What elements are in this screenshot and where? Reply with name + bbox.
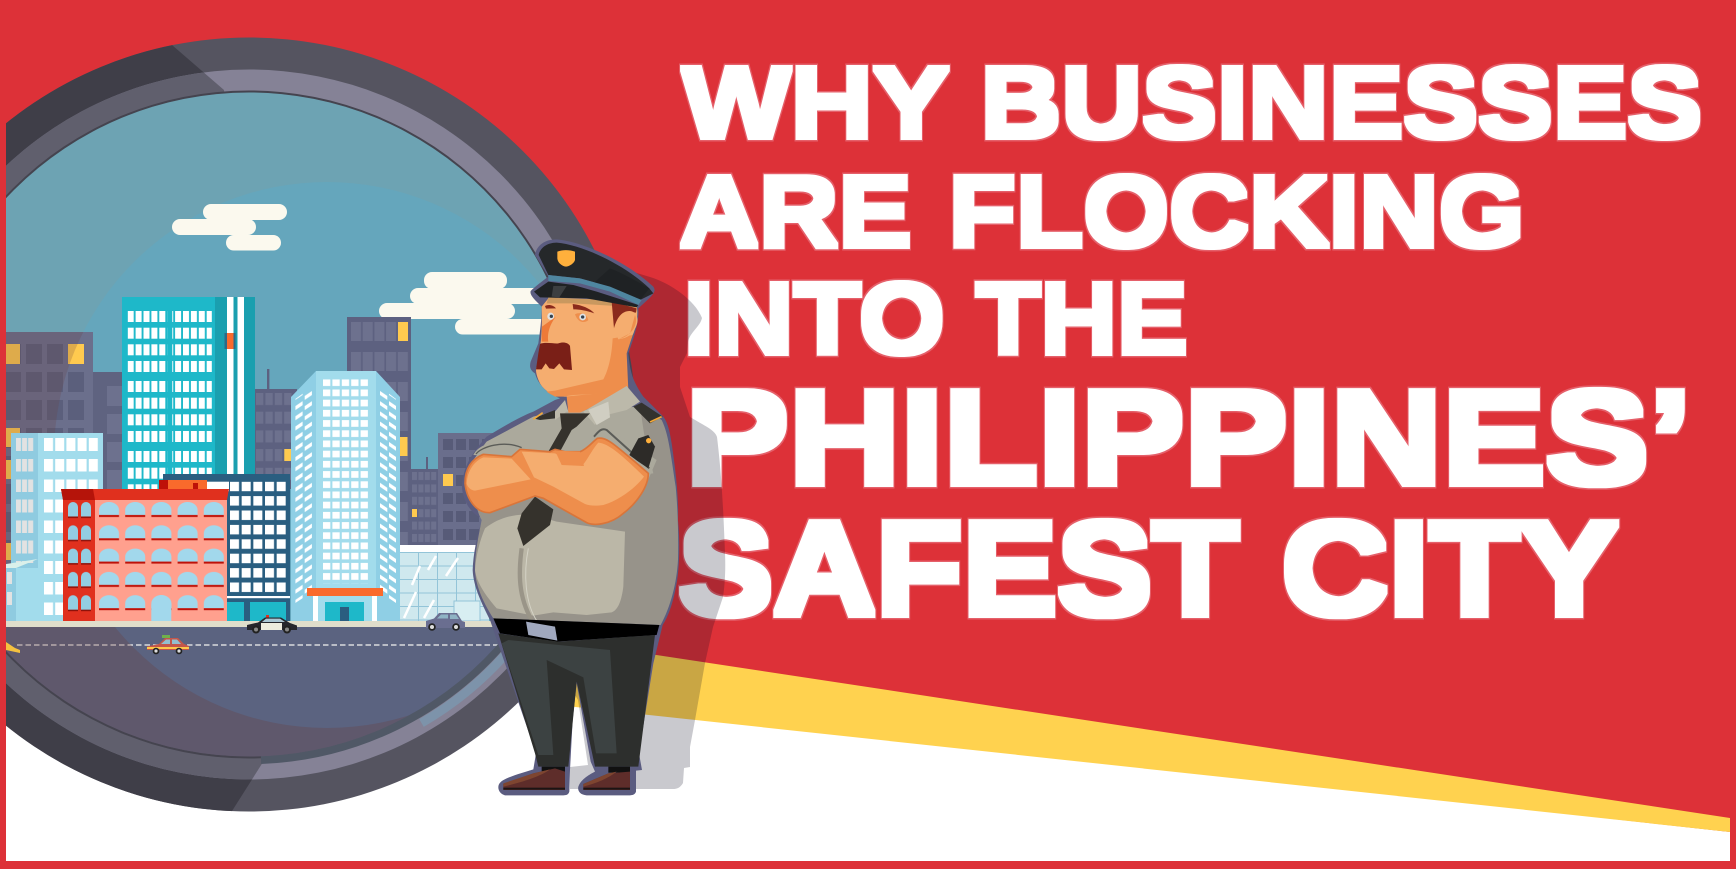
trousers bbox=[498, 633, 655, 767]
back building right bbox=[438, 433, 492, 545]
road bbox=[6, 627, 498, 756]
moustache bbox=[536, 343, 572, 370]
back building left bbox=[6, 332, 122, 564]
sidewalk bbox=[6, 621, 492, 627]
neck shade bbox=[547, 335, 633, 396]
title upper lines: BUSINESSES bbox=[980, 47, 1702, 159]
crossed arms bbox=[465, 438, 648, 524]
small back building bbox=[411, 457, 439, 549]
navy building bbox=[163, 474, 290, 621]
city scene inside lens bbox=[6, 92, 560, 756]
silhouette outline bbox=[462, 239, 679, 795]
face bbox=[536, 298, 637, 397]
tie bbox=[517, 413, 590, 546]
brows and eyes bbox=[545, 304, 594, 322]
title lower lines: SAFEST bbox=[678, 495, 1239, 642]
collar bbox=[555, 386, 640, 425]
porthole lens ring bbox=[0, 0, 636, 830]
cloud upper left bbox=[172, 204, 287, 250]
title upper lines: INTO bbox=[684, 263, 945, 375]
policeman shadow bbox=[520, 262, 725, 789]
title upper lines: FLOCKING bbox=[948, 156, 1525, 268]
title upper lines: WHY bbox=[682, 47, 949, 159]
epaulettes bbox=[533, 403, 663, 423]
title upper lines bbox=[680, 47, 1702, 375]
title lower lines: PHILIPPINES’ bbox=[685, 364, 1692, 511]
forehead shade bbox=[547, 297, 637, 307]
nose shade bbox=[542, 317, 556, 342]
road centre dashes bbox=[17, 644, 520, 646]
title bbox=[678, 47, 1702, 642]
shoes bbox=[503, 767, 630, 790]
left sleeve bbox=[473, 440, 522, 457]
policeman bbox=[462, 239, 679, 795]
title upper lines: ARE bbox=[680, 156, 912, 268]
neck bbox=[547, 335, 633, 413]
belt bbox=[493, 618, 659, 642]
light blue left building bbox=[0, 433, 103, 621]
cap badge bbox=[557, 250, 575, 267]
red brick building bbox=[61, 480, 229, 621]
radio on shoulder bbox=[629, 435, 655, 468]
cloud right bbox=[379, 272, 548, 334]
yellow stripe bbox=[400, 616, 1730, 832]
teal tower bbox=[122, 297, 255, 507]
shirt bbox=[473, 407, 678, 625]
police car bbox=[247, 615, 297, 634]
hair and ear bbox=[612, 302, 638, 339]
title lower lines bbox=[678, 364, 1692, 642]
red car bbox=[147, 635, 189, 654]
glass building bbox=[399, 545, 489, 621]
police cap bbox=[534, 243, 653, 307]
title lower lines: CITY bbox=[1281, 495, 1618, 642]
right sleeve bbox=[594, 426, 657, 482]
grey car bbox=[426, 613, 465, 631]
yellow car bbox=[6, 642, 20, 653]
light blue centre tower bbox=[291, 371, 400, 621]
tall back building bbox=[347, 317, 411, 557]
title upper lines: THE bbox=[976, 263, 1188, 375]
back building with antenna bbox=[255, 369, 297, 489]
white lower wedge bbox=[6, 640, 1730, 861]
sky bbox=[6, 92, 560, 621]
